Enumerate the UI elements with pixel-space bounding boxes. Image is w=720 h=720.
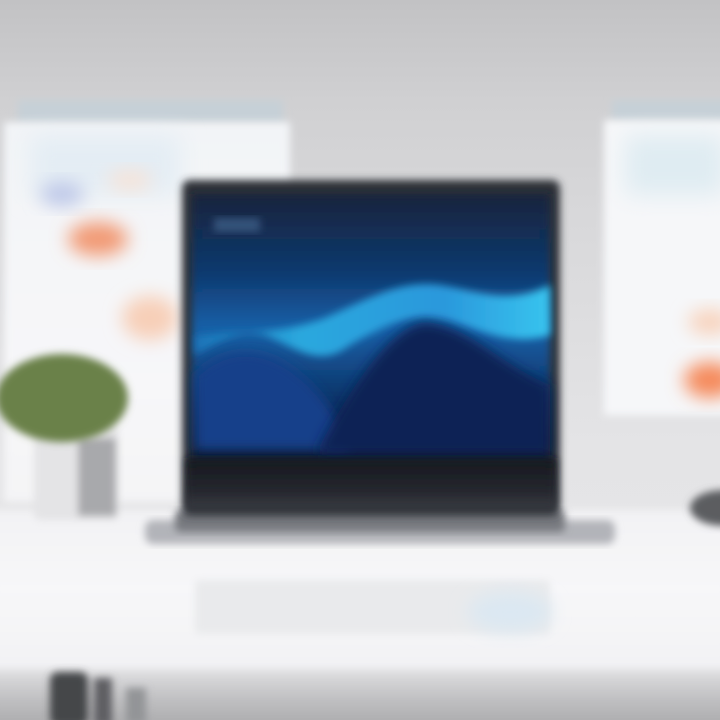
laptop chin xyxy=(186,458,556,508)
desk surface xyxy=(0,510,720,668)
plant foliage xyxy=(0,354,128,442)
dark blue hill left xyxy=(195,352,350,450)
screen glow wave xyxy=(195,284,550,356)
laptop screen xyxy=(192,194,550,462)
laptop bezel xyxy=(182,180,560,516)
right edge dark object xyxy=(690,490,720,526)
laptop shadow xyxy=(145,520,615,544)
keyboard on desk xyxy=(195,580,552,634)
panel: right wall chart xyxy=(604,100,720,415)
panel: left wall chart xyxy=(4,100,290,502)
bottom floor strip xyxy=(0,672,720,720)
laptop base xyxy=(175,510,565,532)
icon: dark object at bottom left xyxy=(50,672,146,720)
laptop xyxy=(145,180,615,544)
screen text smudge xyxy=(214,218,260,232)
icon: potted plant xyxy=(0,354,128,520)
plant pot xyxy=(34,425,118,520)
dark blue hill right xyxy=(320,322,550,455)
